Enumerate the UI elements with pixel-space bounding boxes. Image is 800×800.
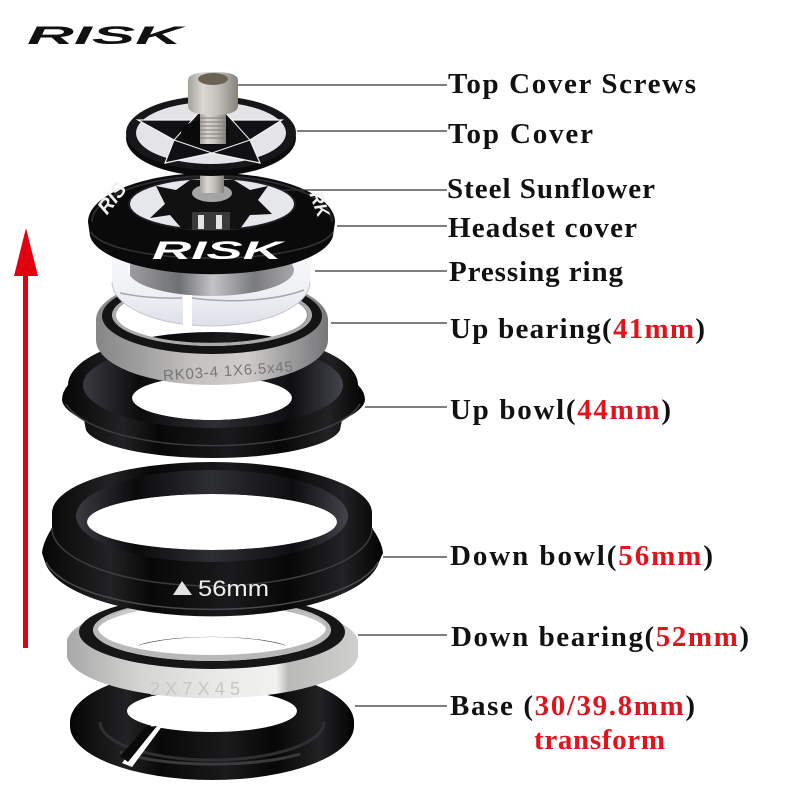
label: top cover screws: Top Cover Screws (448, 68, 696, 100)
label: up bearing: Up bearing(41mm) (450, 313, 705, 345)
part: headset cover (88, 172, 335, 274)
part: top cover screw (188, 72, 238, 144)
part: pressing ring (112, 244, 312, 327)
bearing engraving: 2X7X45 (150, 679, 240, 699)
engraved 56mm mark: 56mm (198, 576, 269, 601)
label: headset cover: Headset cover (448, 212, 637, 244)
part: top cover (126, 96, 296, 176)
label: up bowl: Up bowl(44mm) (450, 394, 671, 426)
star (138, 98, 282, 163)
bearing engraving: RK03-4 1X6.5x45 (163, 358, 293, 385)
part: up bowl (62, 332, 365, 458)
label: pressing ring: Pressing ring (449, 256, 624, 288)
part: down bowl (42, 462, 383, 616)
label: down bearing: Down bearing(52mm) (451, 621, 749, 653)
label: down bowl: Down bowl(56mm) (450, 540, 713, 572)
label: transform: transform (534, 724, 665, 756)
leader lines (238, 85, 447, 706)
label: steel sunflower: Steel Sunflower (447, 173, 655, 205)
part: base (70, 668, 354, 780)
cover opening with spider (128, 172, 296, 231)
side logo right: RK (306, 188, 334, 222)
engraved 56mm mark (173, 576, 269, 601)
side logo left: RIS (93, 178, 132, 219)
small cover logo: RISK (194, 163, 232, 172)
label: base: Base (30/39.8mm) (450, 690, 695, 722)
arrow: upward red arrow (14, 228, 38, 648)
label: top cover: Top Cover (448, 118, 593, 150)
cover logo: RISK (152, 237, 286, 265)
part: up bearing (96, 275, 328, 385)
logo: RISK: RISK (27, 22, 187, 50)
part: down bearing (67, 595, 358, 699)
